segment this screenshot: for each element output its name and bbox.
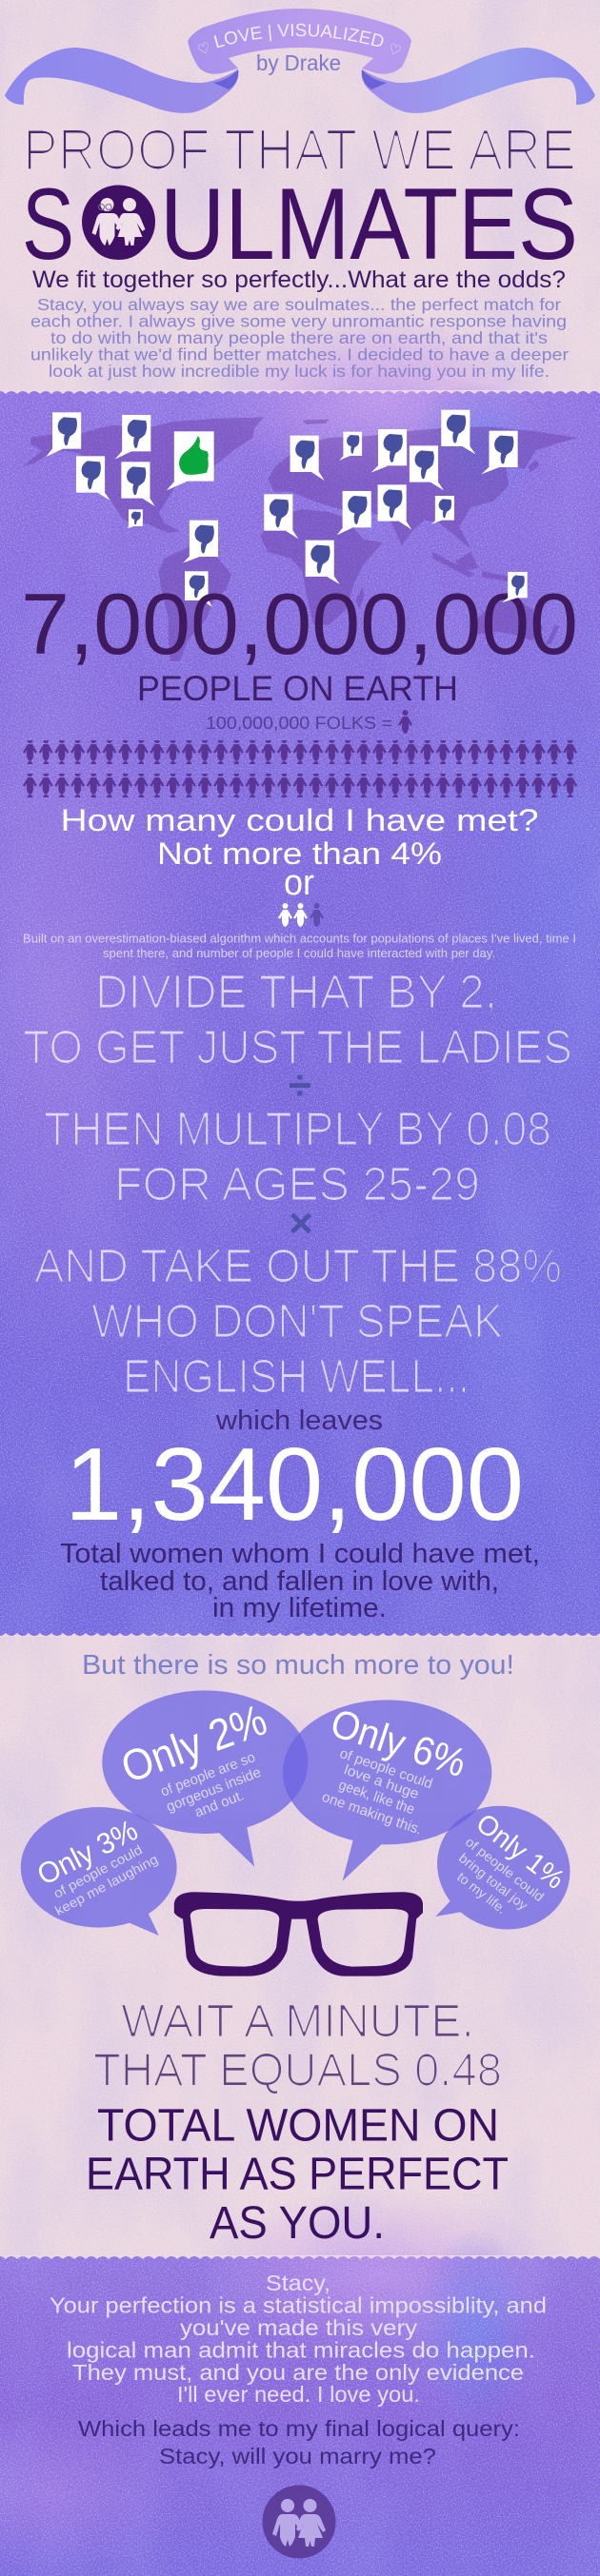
wait a minute: WAIT A MINUTE.: [121, 1996, 474, 2047]
bubble: thumbs down: [481, 431, 518, 474]
bubble 1% text: to my life.: [454, 1869, 510, 1917]
bubble 6% shape: [283, 1700, 491, 1881]
legend: folks per icon: 100,000,000 FOLKS =: [206, 714, 392, 733]
step: multiply by 0.08: FOR AGES 25-29: [114, 1159, 480, 1210]
footnote: Built on an overestimation-biased algorithm which accounts for populations of places I've lived, time I: [23, 933, 576, 946]
wait a minute: [93, 1996, 502, 2095]
ribbon banner: [5, 9, 595, 113]
step: divide by 2: DIVIDE THAT BY 2,: [95, 967, 497, 1018]
icon: person: [398, 710, 412, 734]
step: divide by 2: TO GET JUST THE LADIES: [23, 1022, 572, 1073]
bubble 6% text: love a huge: [342, 1761, 421, 1802]
letter to Stacy: Stacy,: [266, 2271, 330, 2295]
caption: total women: [60, 1539, 540, 1623]
speech bubble shapes: [21, 1690, 586, 1941]
heart right: ♡: [386, 40, 404, 60]
caption: total women: talked to, and fallen in love with,: [100, 1566, 499, 1597]
conclusion heading: [86, 2101, 509, 2249]
bubble: thumbs down: [306, 541, 340, 584]
australia: [474, 597, 544, 640]
bubble 6% text: [320, 1700, 471, 1839]
bubble 1% text: of people could: [463, 1834, 547, 1904]
bubble 2% text: Only 2%: [114, 1695, 273, 1792]
question: how many could I have met: or: [284, 863, 314, 903]
bubble 2% text: [114, 1695, 273, 1820]
bubble 1% shape: [422, 1794, 586, 1941]
intro paragraph: Stacy, you always say we are soulmates... the perfect match for: [37, 295, 561, 314]
letter S: S: [22, 167, 74, 281]
bubble: thumbs down over number: [502, 572, 528, 602]
bubble 6% text: one making this.: [320, 1789, 424, 1839]
icon: couple in circle: [263, 2486, 335, 2558]
intro paragraph: to do with how many people there are on earth, and that it's: [50, 328, 548, 347]
ribbon right tail: [362, 48, 595, 113]
step: take out non-English speakers: [34, 1241, 562, 1403]
icon: glasses: [174, 1892, 423, 1976]
bubble: thumbs down: [183, 521, 218, 563]
conclusion heading: AS YOU.: [210, 2198, 385, 2249]
subtitle: We fit together so perfectly...What are the odds?: [32, 266, 566, 293]
bubble: thumbs down: [337, 491, 371, 535]
letter to Stacy: I'll ever need. I love you.: [177, 2382, 420, 2407]
big number: 1,340,000: 1,340,000: [65, 1426, 524, 1543]
letter to Stacy: you've made this very: [180, 2315, 418, 2340]
question: how many could I have met: How many could I have met?: [61, 803, 539, 837]
bubble 3% text: [31, 1813, 160, 1918]
caption: total women: in my lifetime.: [212, 1593, 387, 1623]
bubble: thumbs down: [410, 445, 444, 490]
bubble 2% shape: [102, 1690, 308, 1867]
bubble 3% shape: [21, 1807, 177, 1936]
bubble: thumbs down: [185, 571, 212, 607]
ribbon folds: [213, 69, 387, 89]
thumbs bubbles on map: [46, 410, 518, 607]
bubble 3% text: of people could: [50, 1841, 145, 1901]
step: multiply by 0.08: [44, 1104, 551, 1210]
byline: by Drake: [256, 50, 341, 75]
step: take out non-English speakers: AND TAKE OUT THE 88%: [34, 1241, 562, 1292]
heading: people on earth: PEOPLE ON EARTH: [137, 669, 458, 708]
question: how many could I have met: [61, 803, 539, 903]
bubble: thumbs down: [264, 494, 298, 539]
letter to Stacy: They must, and you are the only evidence: [72, 2360, 524, 2385]
wait a minute: THAT EQUALS 0.48: [93, 2046, 502, 2095]
eurasia: [268, 426, 578, 549]
bubble: thumbs down: [115, 415, 150, 460]
bubble: thumbs down small: [339, 432, 362, 461]
ribbon arch label: LOVE | VISUALIZED: [213, 23, 383, 48]
bubble: thumbs down small: [431, 496, 454, 524]
final question: Which leads me to my final logical query:: [78, 2416, 520, 2441]
intro paragraph: look at just how incredible my luck is for having you in my life.: [49, 362, 550, 381]
final question: Stacy, will you marry me?: [159, 2444, 436, 2468]
legend: folks per icon: [206, 710, 412, 734]
step: divide by 2: [23, 967, 572, 1073]
title: soulmates: [22, 167, 578, 281]
world map: [23, 417, 578, 661]
letter to Stacy: Your perfection is a statistical impossiblity, and: [50, 2292, 547, 2317]
caption: total women: Total women whom I could have met,: [60, 1539, 540, 1569]
which leaves: which leaves: [215, 1406, 383, 1436]
bubble 2% text: and out.: [192, 1787, 247, 1820]
bubble: thumbs down: [46, 412, 81, 457]
step: multiply by 0.08: THEN MULTIPLY BY 0.08: [44, 1104, 551, 1155]
heading: so much more: But there is so much more to you!: [82, 1650, 514, 1681]
bubble: thumbs down: [441, 410, 475, 454]
conclusion heading: EARTH AS PERFECT: [86, 2149, 509, 2200]
bubble 6% text: Only 6%: [326, 1700, 471, 1785]
bubble: thumbs down: [290, 436, 325, 481]
heart left: ♡: [195, 39, 213, 59]
bubble 3% text: Only 3%: [31, 1813, 143, 1892]
step: take out non-English speakers: WHO DON'T SPEAK: [91, 1296, 503, 1347]
bubble: green thumbs up: [167, 431, 214, 490]
bubble 2% text: gorgeous inside: [164, 1764, 263, 1816]
bubble: thumbs down small: [128, 509, 143, 528]
ribbon left tail: [5, 48, 238, 113]
letter to Stacy: logical man admit that miracles do happen.: [67, 2338, 535, 2363]
conclusion heading: TOTAL WOMEN ON: [97, 2101, 499, 2151]
bubble 6% text: of people could: [337, 1745, 434, 1792]
icon: multiply sign: ×: [289, 1200, 313, 1247]
question: how many could I have met: Not more than 4%: [157, 836, 442, 871]
icon: two of three people: [278, 903, 324, 927]
bubble: thumbs down: [121, 462, 155, 506]
people pictogram rows: [23, 740, 579, 797]
letter to Stacy: [50, 2271, 547, 2407]
ribbon arch: [188, 9, 411, 74]
footnote: [23, 933, 576, 960]
intro paragraph: unlikely that we'd find better matches. I decided to have a deeper: [30, 344, 569, 364]
south america: [159, 545, 231, 661]
africa: [260, 509, 383, 625]
intro paragraph: [30, 295, 569, 381]
north america: [23, 417, 264, 533]
bubble: thumbs down: [76, 456, 110, 501]
bubble 1% text: Only 1%: [470, 1808, 570, 1896]
bubble 1% text: [454, 1808, 570, 1917]
bubble: thumbs down: [378, 484, 411, 530]
bubble 3% text: keep me laughing: [52, 1851, 160, 1918]
final question: [78, 2416, 520, 2468]
icon: divide sign: ÷: [289, 1062, 311, 1109]
bubble 1% text: bring total joy: [456, 1850, 530, 1913]
step: take out non-English speakers: ENGLISH WELL...: [123, 1351, 470, 1403]
big number: world population: 7,000,000,000: [21, 577, 578, 673]
bubble 6% text: geek, like the: [336, 1777, 416, 1818]
islands: [302, 420, 559, 645]
bubble: thumbs down: [371, 429, 407, 473]
bubble 2% text: of people are so: [158, 1749, 257, 1800]
footnote: spent there, and number of people I could have interacted with per day.: [103, 947, 495, 960]
letter O with couple icon: O: [82, 167, 155, 281]
intro paragraph: each other. I always give some very unromantic response having: [30, 312, 567, 331]
